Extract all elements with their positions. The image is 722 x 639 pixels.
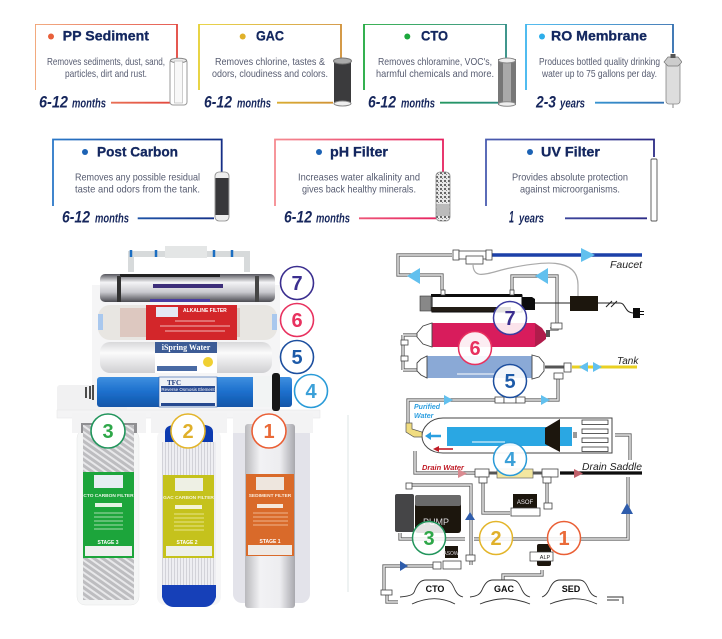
panel: Post Carbon: [53, 140, 229, 227]
panel: GAC: [199, 24, 352, 111]
RO membrane schematic: [422, 418, 612, 453]
sediment housing and cartridge: [233, 413, 313, 608]
lifetime: 6-12 months: months: [95, 211, 129, 226]
lifetime: 1 years: years: [518, 211, 544, 226]
badge 1: [252, 414, 286, 448]
water pipes: [384, 255, 630, 602]
ASOF valve: [511, 494, 552, 516]
panel: RO Membrane: [526, 24, 682, 111]
pump: [395, 483, 461, 533]
lifetime: 6-12 months: months: [72, 95, 106, 110]
lifetime: 6-12 months: 6-12: [62, 209, 90, 227]
badge 7: [280, 266, 314, 300]
badge 2: [171, 414, 205, 448]
ASOW valve: [381, 546, 475, 595]
label: Drain Water: Drain Water: [422, 463, 465, 472]
description: PP Sediment: Removes sediments, dust, sand,: [47, 56, 165, 68]
RO membrane: TFC: [167, 379, 181, 387]
connectors: [401, 340, 571, 403]
badge 7: [494, 302, 526, 334]
heading: CTO: CTO: [421, 28, 448, 44]
lifetime: 6-12 months: months: [237, 95, 271, 110]
ALP valve: ALP: [540, 555, 551, 561]
description: RO Membrane: water up to 75 gallons per day.: [541, 68, 657, 80]
RO membrane: [86, 373, 292, 411]
UV sterilizer: [100, 274, 275, 302]
lifetime: 6-12 months: 6-12: [204, 93, 232, 111]
lifetime: 6-12 months: 6-12: [284, 209, 312, 227]
icon: UV lamp: [651, 159, 657, 221]
description: CTO: Removes chloramine, VOC's,: [378, 56, 492, 68]
lifetime: 6-12 months: 6-12: [39, 93, 68, 111]
description: Post Carbon: [75, 172, 200, 196]
label: Drain Saddle: Drain Saddle: [582, 461, 642, 473]
post carbon filter: iSpring Water: [162, 343, 211, 352]
description: pH Filter: [298, 172, 420, 196]
lifetime: 6-12 months: [62, 209, 129, 227]
description: Post Carbon: taste and odors from the tank.: [75, 184, 200, 196]
description: pH Filter: gives back healthy minerals.: [302, 184, 416, 196]
GAC housing and cartridge: GAC CARBON FILTER: [163, 495, 214, 501]
badge 6: [280, 304, 314, 336]
heading: pH Filter: pH Filter: [330, 144, 389, 160]
description: PP Sediment: [47, 56, 165, 80]
badge 4: [294, 374, 328, 408]
badge 6: [458, 332, 492, 364]
heading: PP Sediment: PP Sediment: [63, 28, 149, 44]
purified water fitting: [406, 423, 422, 437]
lifetime: 2-3 years: 2-3: [535, 93, 556, 111]
product photo: seven stage filter system: [57, 246, 348, 608]
diagram number badges: [412, 302, 580, 554]
description: PP Sediment: particles, dirt and rust.: [65, 68, 147, 80]
badge 5: [494, 364, 526, 398]
ASOW valve: ASOW: [443, 551, 459, 557]
lifetime: 6-12 months: months: [401, 95, 435, 110]
UV chamber schematic: [420, 290, 644, 318]
drain saddle line: [560, 471, 642, 475]
description: GAC: odors, cloudiness and colors.: [212, 68, 328, 80]
badge 4: [494, 442, 526, 476]
UV tubing: [131, 246, 247, 272]
lifetime: 6-12 months: [204, 93, 271, 111]
icon: sediment cartridge: [170, 58, 187, 105]
badge 2: 2: [490, 528, 502, 550]
faucet line: [492, 253, 642, 257]
pump: PUMP: [423, 517, 449, 527]
description: GAC: Removes chlorine, tastes &: [215, 56, 325, 68]
lifetime: 6-12 months: [368, 93, 435, 111]
panel: pH Filter: [275, 140, 450, 227]
badge 3: [412, 522, 446, 554]
badge 7: 7: [504, 308, 516, 330]
flow arrows: [400, 248, 633, 571]
post carbon filter schematic: [417, 355, 544, 379]
heading: GAC: GAC: [256, 28, 284, 44]
badge 6: 6: [469, 338, 481, 360]
ALP valve: [530, 544, 553, 566]
badge 5: 5: [291, 347, 303, 369]
RO membrane: Reverse Osmosis Element: [161, 387, 215, 392]
stage housings: CTO, GAC, SED: [400, 580, 623, 604]
ASOF valve: ASOF: [517, 500, 533, 506]
lifetime: 1 years: [509, 209, 544, 227]
lifetime: 6-12 months: 6-12: [368, 93, 396, 111]
post carbon filter: [100, 342, 272, 373]
description: RO Membrane: [539, 56, 660, 80]
photo number badges: [91, 266, 328, 448]
label: Purified Water: Purified: [414, 404, 441, 411]
description: Post Carbon: Removes any possible residual: [75, 172, 200, 184]
GAC housing and cartridge: STAGE 2: [176, 540, 198, 546]
CTO housing and cartridge: STAGE 3: [97, 540, 119, 546]
alkaline filter: ALKALINE FILTER: [183, 308, 227, 314]
alkaline filter schematic: [417, 323, 562, 347]
manifold bracket: [57, 285, 320, 418]
lifetime: 6-12 months: months: [316, 211, 350, 226]
badge 4: 4: [305, 381, 317, 403]
CTO housing and cartridge: CTO CARBON FILTER: [83, 493, 134, 499]
icon: GAC cartridge: [334, 58, 352, 106]
flow diagram: [381, 248, 644, 604]
sediment housing and cartridge: SEDIMENT FILTER: [249, 493, 292, 499]
description: GAC: [212, 56, 328, 80]
lifetime: 2-3 years: years: [559, 95, 585, 110]
panel: CTO: [364, 24, 516, 111]
stage housings: CTO, GAC, SED: SED: [562, 584, 581, 594]
description: CTO: [376, 56, 494, 80]
description: CTO: harmful chemicals and more.: [376, 68, 494, 80]
stage housings: CTO, GAC, SED: CTO: [426, 584, 444, 594]
tank line: [572, 366, 637, 368]
panel: PP Sediment: [35, 24, 187, 111]
badge 3: 3: [423, 528, 435, 550]
label: Faucet: Faucet: [610, 259, 643, 271]
badge 5: [280, 340, 314, 374]
GAC housing and cartridge: [151, 413, 227, 607]
description: UV Filter: against microorganisms.: [520, 184, 620, 196]
icon: CTO cartridge: [498, 58, 516, 106]
description: UV Filter: Provides absolute protection: [512, 172, 628, 184]
label: Purified Water: Water: [414, 413, 435, 420]
badge 2: [480, 522, 512, 554]
badge 2: 2: [182, 421, 194, 443]
heading: Post Carbon: Post Carbon: [97, 144, 178, 160]
description: UV Filter: [512, 172, 628, 196]
badge 5: 5: [504, 371, 516, 393]
UV power wire: [473, 263, 578, 296]
badge 3: 3: [102, 421, 114, 443]
faucet valve: [453, 250, 492, 264]
icon: pH cartridge: [436, 172, 450, 221]
description: pH Filter: Increases water alkalinity and: [298, 172, 420, 184]
badge 7: 7: [291, 273, 303, 295]
stage housings: CTO, GAC, SED: GAC: [494, 584, 514, 594]
heading: RO Membrane: RO Membrane: [551, 28, 647, 44]
badge 1: [548, 522, 580, 554]
description: RO Membrane: Produces bottled quality drinking: [539, 56, 660, 68]
badge 3: [91, 414, 125, 448]
label: Purified Water: [414, 404, 441, 420]
sediment housing and cartridge: STAGE 1: [259, 539, 281, 545]
CTO housing and cartridge: [72, 413, 146, 605]
alkaline filter: [98, 305, 277, 340]
label: Tank: Tank: [617, 356, 639, 367]
lifetime: 2-3 years: [535, 93, 585, 111]
icon: post carbon cartridge: [215, 172, 229, 221]
panel: UV Filter: [486, 140, 657, 227]
badge 6: 6: [291, 310, 303, 332]
badge 4: 4: [504, 449, 516, 471]
lifetime: 6-12 months: [284, 209, 350, 227]
lifetime: 6-12 months: [39, 93, 106, 111]
badge 1: 1: [558, 528, 570, 550]
lifetime: 1 years: 1: [509, 209, 514, 227]
heading: UV Filter: UV Filter: [541, 144, 601, 160]
icon: RO membrane: [664, 54, 682, 108]
drain flow restrictor: [475, 469, 558, 483]
badge 1: 1: [263, 421, 275, 443]
